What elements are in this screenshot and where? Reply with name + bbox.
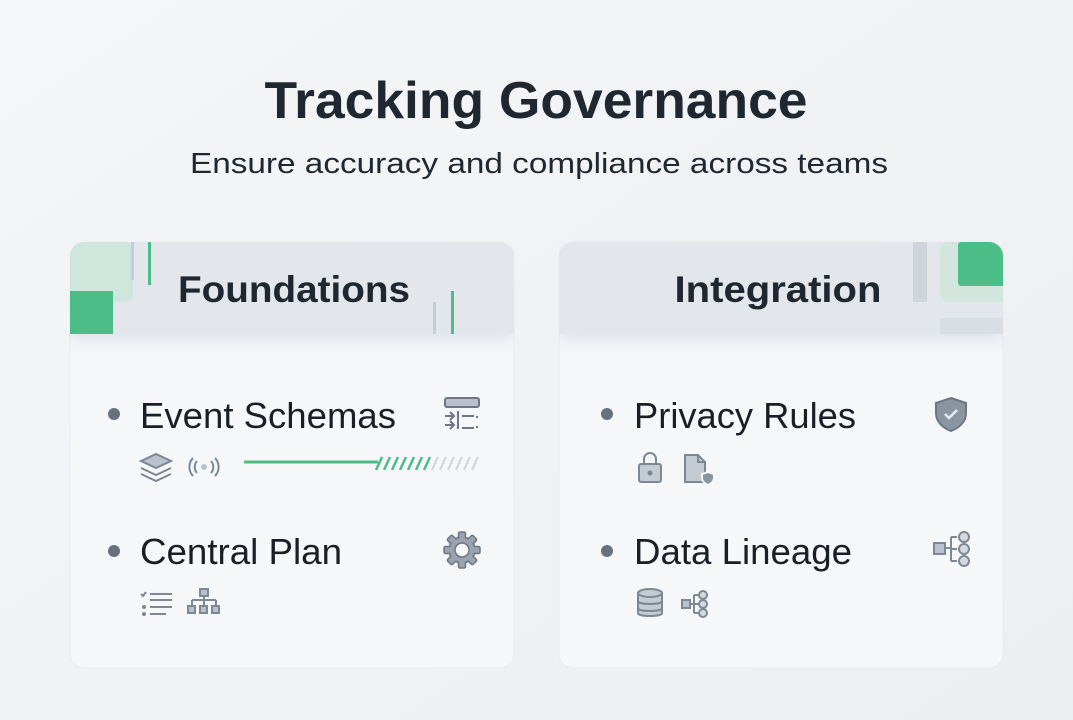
item: event schemas — [108, 395, 479, 436]
subtitle: Ensure accuracy and compliance across teams — [190, 148, 888, 180]
icons: lock, secure doc — [639, 453, 714, 485]
item: privacy rules — [601, 395, 966, 436]
icons: layers, signal, progress — [141, 454, 478, 481]
item: event schemas: Event Schemas — [140, 395, 396, 436]
heading: foundations: Foundations — [178, 269, 410, 310]
icons: checklist, hierarchy — [141, 589, 219, 615]
panel: foundations — [70, 242, 514, 668]
item: privacy rules: Privacy Rules — [634, 395, 856, 436]
item: central plan: Central Plan — [140, 531, 342, 572]
item: data lineage — [601, 531, 969, 572]
item: data lineage: Data Lineage — [634, 531, 852, 572]
icons: database, lineage — [638, 589, 707, 617]
title: Tracking Governance — [264, 72, 808, 130]
panel: integration — [559, 242, 1010, 668]
item: central plan — [108, 531, 480, 572]
heading: integration: Integration — [674, 269, 882, 310]
